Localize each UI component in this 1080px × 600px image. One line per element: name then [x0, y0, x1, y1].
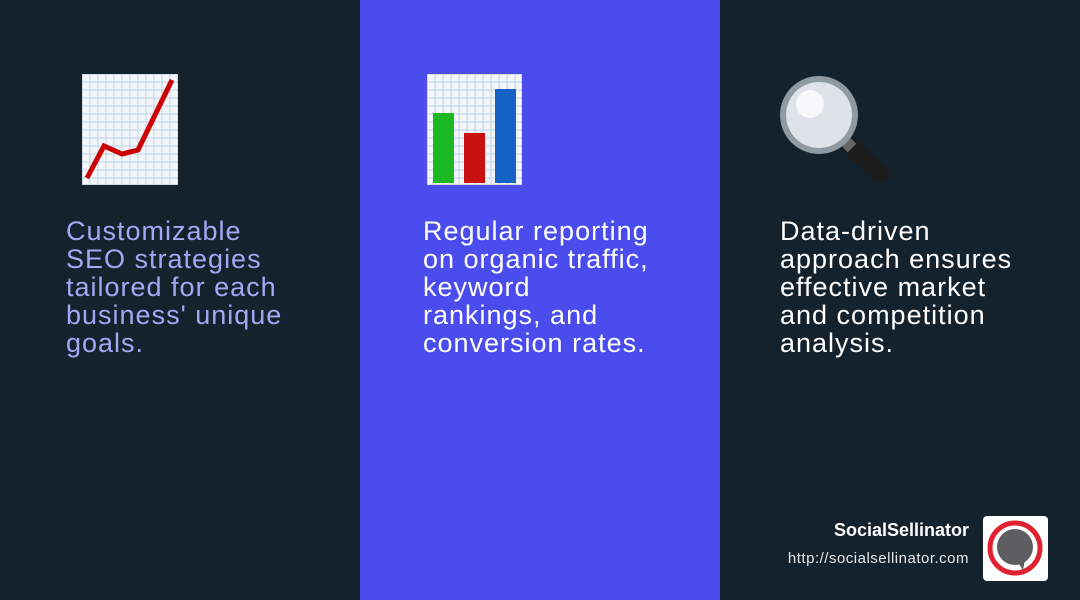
text: middle: on organic traffic, — [423, 244, 649, 274]
text: right: Data-driven — [780, 216, 931, 246]
text: left: Customizable — [66, 216, 242, 246]
text: right: analysis. — [780, 328, 894, 358]
text: middle — [423, 216, 649, 358]
text: middle: rankings, and — [423, 300, 598, 330]
logo — [983, 516, 1048, 581]
text: middle: conversion rates. — [423, 328, 646, 358]
brand url: http://socialsellinator.com — [788, 550, 969, 567]
text: left: goals. — [66, 328, 144, 358]
text: left — [66, 216, 282, 358]
icon: bar chart — [427, 74, 522, 185]
panel: left — [0, 0, 360, 600]
text: middle: Regular reporting — [423, 216, 649, 246]
text: left: tailored for each — [66, 272, 277, 302]
panel: middle — [360, 0, 720, 600]
footer brand — [788, 516, 1048, 581]
text: left: business' unique — [66, 300, 282, 330]
icon: magnifier — [780, 76, 889, 183]
text: right — [780, 216, 1012, 358]
text: middle: keyword — [423, 272, 531, 302]
brand name: SocialSellinator — [834, 520, 969, 540]
text: right: effective market — [780, 272, 986, 302]
panel: right — [720, 0, 1080, 600]
text: left: SEO strategies — [66, 244, 262, 274]
text: right: and competition — [780, 300, 986, 330]
icon: line chart — [82, 74, 178, 185]
text: right: approach ensures — [780, 244, 1012, 274]
